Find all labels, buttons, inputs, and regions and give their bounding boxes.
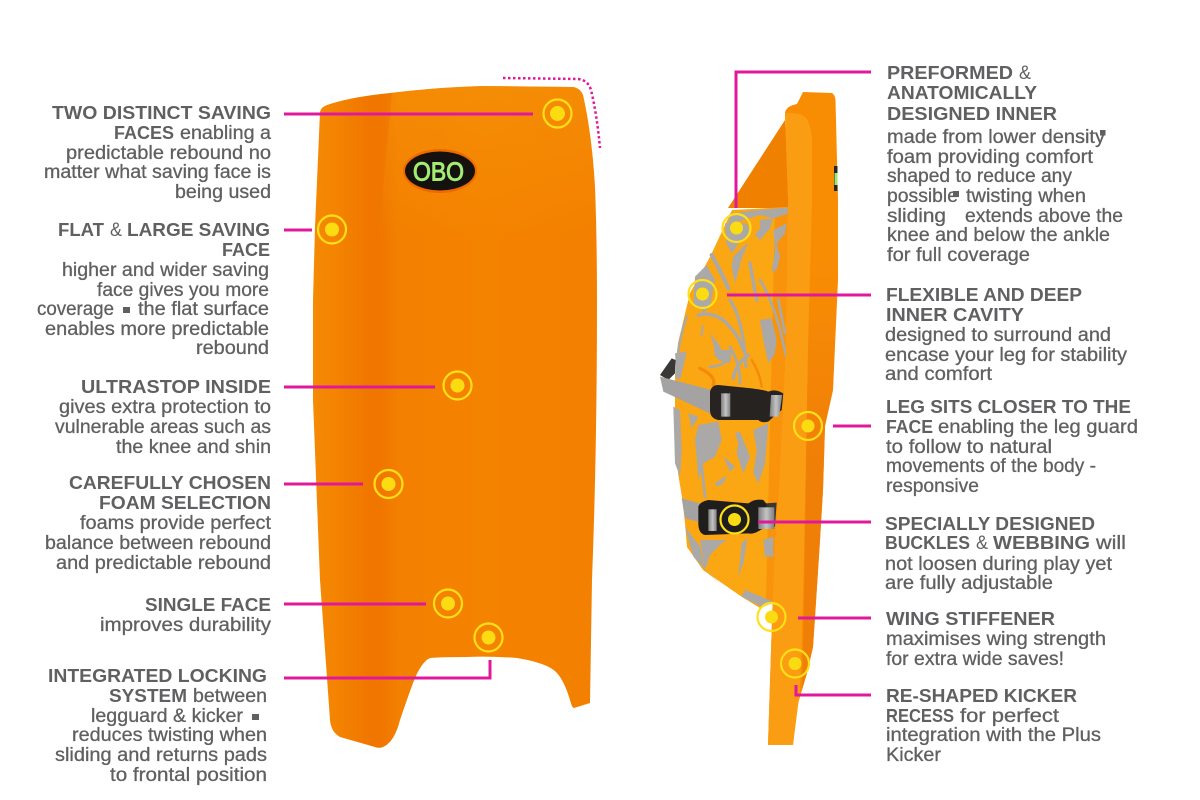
callout: preformed and anatomically designed inner: made from lower density	[887, 126, 1105, 148]
callout: flexible and deep inner cavity: designed to surround and	[885, 324, 1111, 346]
callout: single face: SINGLE FACE	[145, 594, 271, 615]
callout: ultrastop inside: gives extra protection to	[59, 396, 271, 418]
callout: carefully chosen foam selection: CAREFULLY CHOSEN	[69, 472, 271, 493]
callout: two distinct saving faces: predictable rebound no	[66, 142, 271, 164]
callout: specially designed buckles and webbing: are fully adjustable	[885, 572, 1053, 594]
top strap and buckle	[660, 358, 783, 422]
callout: preformed and anatomically designed inner: shaped to reduce any	[887, 165, 1072, 187]
callout: specially designed buckles and webbing: not loosen during play yet	[885, 553, 1113, 575]
callout: carefully chosen foam selection: foams provide perfect	[80, 512, 272, 534]
callout: two distinct saving faces: FACES	[114, 122, 174, 143]
callout: preformed and anatomically designed inner: possible	[887, 185, 958, 207]
callout: flexible and deep inner cavity: INNER CAVITY	[886, 304, 1025, 325]
callout: flat and large saving face: higher and wider saving	[62, 259, 269, 281]
callout: preformed and anatomically designed inner: ANATOMICALLY	[887, 82, 1038, 103]
callout: flat and large saving face	[37, 219, 270, 359]
callout: two distinct saving faces: being used	[175, 181, 271, 203]
callout: flat and large saving face: FACE	[222, 239, 270, 260]
callout: flat and large saving face: face gives you more	[97, 279, 269, 301]
callout: wing stiffener	[886, 608, 1106, 670]
wedge behind inner	[728, 120, 790, 208]
logo: OBO badge	[403, 149, 477, 193]
callout: integrated locking system: INTEGRATED LOCKING	[48, 665, 267, 686]
callout: leg sits closer to the face	[886, 396, 1138, 497]
callout: preformed and anatomically designed inner: sliding	[887, 205, 946, 227]
callout: specially designed buckles and webbing: will	[1095, 532, 1126, 554]
markers	[318, 100, 822, 678]
callout: integrated locking system: between	[193, 685, 267, 707]
callout: leg sits closer to the face: movements of the body -	[886, 455, 1096, 477]
callout: specially designed buckles and webbing: WEBBING	[993, 532, 1090, 553]
callout: flexible and deep inner cavity: encase your leg for stability	[885, 344, 1127, 366]
callout: preformed and anatomically designed inner: &	[1019, 62, 1031, 84]
callout: ultrastop inside: ULTRASTOP INSIDE	[81, 376, 271, 397]
callout: ultrastop inside	[55, 376, 271, 458]
callout: flat and large saving face: &	[110, 219, 122, 241]
callout: preformed and anatomically designed inner	[887, 62, 1123, 266]
callout: carefully chosen foam selection: balance between rebound	[45, 532, 271, 554]
swirl upper	[675, 207, 788, 387]
leader lines	[284, 72, 871, 695]
callout: preformed and anatomically designed inner: DESIGNED INNER	[887, 103, 1057, 124]
callout: specially designed buckles and webbing: &	[976, 532, 988, 554]
callout: preformed and anatomically designed inner: PREFORMED	[887, 62, 1013, 83]
callout: integrated locking system: SYSTEM	[109, 685, 187, 706]
callout: two distinct saving faces: TWO DISTINCT SAVING	[52, 102, 271, 123]
callout: leg sits closer to the face: to follow to natural	[886, 436, 1052, 458]
callout: leg sits closer to the face: responsive	[886, 475, 979, 497]
callout: flat and large saving face: rebound	[196, 337, 269, 359]
callout: re-shaped kicker recess	[886, 685, 1101, 766]
callout: integrated locking system	[48, 665, 267, 786]
callout: preformed and anatomically designed inner: twisting when	[966, 185, 1086, 207]
callout: re-shaped kicker recess: Kicker	[886, 744, 942, 766]
callout: integrated locking system: to frontal position	[110, 764, 267, 786]
callout: flat and large saving face: LARGE SAVING	[127, 219, 270, 240]
callout: leg sits closer to the face: LEG SITS CLOSER TO THE	[886, 396, 1131, 417]
callout: flat and large saving face: the flat surface	[138, 298, 269, 320]
callout: flat and large saving face: coverage	[37, 298, 114, 320]
side leg guard	[660, 92, 838, 745]
callout: carefully chosen foam selection: FOAM SELECTION	[99, 492, 271, 513]
callout: preformed and anatomically designed inner: foam providing comfort	[887, 146, 1094, 168]
logo: OBO badge: OBO	[413, 156, 464, 186]
callout: integrated locking system: legguard & kicker	[91, 705, 243, 727]
inner foam with swirl pattern	[673, 207, 788, 608]
swirl middle	[673, 350, 768, 497]
callout: carefully chosen foam selection: and predictable rebound	[56, 552, 271, 574]
callout: preformed and anatomically designed inner: knee and below the ankle	[887, 224, 1110, 246]
outer face	[768, 92, 838, 745]
callout: re-shaped kicker recess: RECESS	[886, 705, 954, 726]
bottom strap and buckle	[682, 498, 777, 535]
callout: wing stiffener: for extra wide saves!	[886, 648, 1064, 670]
side logo sliver	[834, 166, 838, 191]
callout: specially designed buckles and webbing	[885, 513, 1126, 594]
swirl lower	[685, 527, 773, 607]
callout: carefully chosen foam selection	[45, 472, 272, 574]
callout: single face	[100, 594, 271, 636]
callout: re-shaped kicker recess: integration with the Plus	[886, 724, 1101, 746]
callout: single face: improves durability	[100, 614, 271, 636]
callout: flexible and deep inner cavity	[885, 284, 1127, 385]
callout: ultrastop inside: vulnerable areas such as	[55, 416, 271, 438]
callout: flat and large saving face: enables more predictable	[45, 318, 269, 340]
callout: specially designed buckles and webbing: SPECIALLY DESIGNED	[885, 513, 1095, 534]
callout: preformed and anatomically designed inner: extends above the	[965, 205, 1123, 227]
callout: specially designed buckles and webbing: BUCKLES	[885, 532, 970, 553]
callout: preformed and anatomically designed inner: for full coverage	[887, 244, 1030, 266]
callout: two distinct saving faces: enabling a	[180, 122, 271, 144]
callout: integrated locking system: sliding and returns pads	[55, 744, 267, 766]
callout: integrated locking system: reduces twisting when	[72, 724, 267, 746]
callout: flat and large saving face: FLAT	[58, 219, 105, 240]
front leg guard	[313, 86, 597, 748]
dotted outline: top corner	[503, 78, 600, 148]
callout: two distinct saving faces: matter what saving face is	[44, 161, 271, 183]
callout: leg sits closer to the face: enabling the leg guard	[938, 416, 1138, 438]
callout: two distinct saving faces	[44, 102, 271, 203]
callout: re-shaped kicker recess: RE-SHAPED KICKER	[886, 685, 1077, 706]
callout: re-shaped kicker recess: for perfect	[960, 705, 1060, 727]
lighter front strip	[768, 113, 812, 745]
callout: leg sits closer to the face: FACE	[886, 416, 933, 437]
callout: flexible and deep inner cavity: and comfort	[885, 363, 993, 385]
callout: wing stiffener: maximises wing strength	[886, 628, 1106, 650]
callout: ultrastop inside: the knee and shin	[116, 436, 271, 458]
callout: flexible and deep inner cavity: FLEXIBLE AND DEEP	[886, 284, 1082, 305]
callout: wing stiffener: WING STIFFENER	[886, 608, 1055, 629]
